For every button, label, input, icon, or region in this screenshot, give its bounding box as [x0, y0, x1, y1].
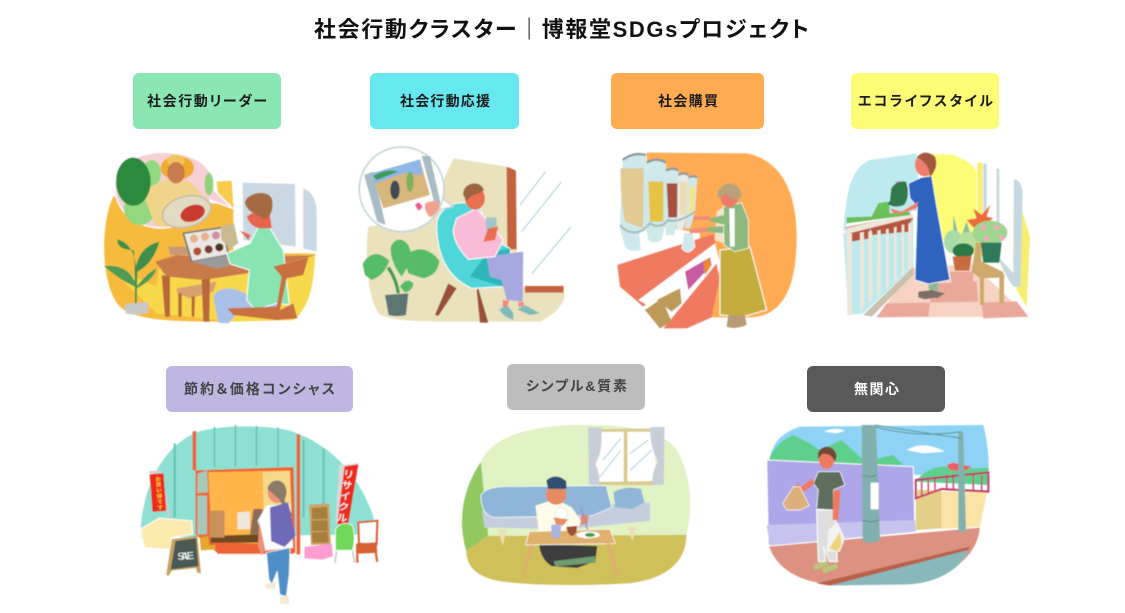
foreground chair	[227, 257, 308, 320]
shop opening	[195, 467, 295, 554]
person eating	[535, 476, 597, 568]
jar	[682, 233, 695, 252]
illustration: online meeting with coffee farmer	[104, 152, 317, 323]
window frames	[983, 163, 1023, 287]
plant	[363, 240, 439, 316]
sofa	[140, 518, 193, 549]
label: 社会行動応援: 社会行動応援	[400, 93, 490, 109]
label: シンプル&質素	[507, 364, 645, 410]
pavement and road	[769, 528, 980, 586]
chairs	[335, 521, 377, 563]
table and chair	[155, 247, 317, 322]
plants and stool	[944, 205, 1007, 305]
speech bubble with farmer	[115, 152, 233, 233]
sky	[770, 425, 989, 475]
window and curtains	[588, 427, 664, 486]
label: 節約&価格コンシャス	[166, 366, 353, 412]
low table	[521, 524, 619, 578]
small chair	[200, 536, 215, 550]
man reading phone	[453, 183, 540, 320]
label: 無関心	[807, 366, 945, 412]
illustration: supporting on social media	[359, 147, 571, 323]
hills and red roof	[769, 435, 989, 485]
yellow wall with red railing	[916, 472, 988, 530]
illustration: indifferent shopper on street	[767, 425, 989, 586]
illustration: bulk store shopper	[617, 153, 797, 328]
beige background	[367, 158, 565, 322]
window	[243, 183, 296, 247]
green wall	[479, 425, 690, 536]
label: 社会購買	[611, 73, 764, 129]
sofa	[481, 486, 650, 546]
balcony floor	[877, 263, 1028, 318]
label: 社会行動リーダー: 社会行動リーダー	[147, 93, 267, 109]
illustration: recycle shop	[140, 425, 377, 604]
recycle banner: リサイクル	[335, 468, 355, 523]
small banner: お買い得です	[154, 475, 163, 511]
label: 社会行動リーダー	[133, 73, 281, 129]
woman with backpack	[258, 480, 295, 604]
label: 社会行動応援	[370, 73, 519, 129]
SALE board	[166, 536, 201, 576]
illustration: watering balcony plants	[843, 153, 1030, 318]
illustration: simple meal at home	[462, 425, 690, 585]
shelf and box	[305, 503, 333, 559]
sky and yellow wall	[843, 153, 920, 233]
label: 無関心: 無関心	[854, 381, 899, 397]
label: エコライフスタイル: エコライフスタイル	[858, 93, 993, 109]
purple wall	[767, 460, 915, 545]
shelf counter	[617, 234, 720, 328]
small banner	[149, 470, 171, 517]
woman in blue dress	[878, 153, 950, 299]
label: エコライフスタイル	[851, 73, 999, 129]
label: 節約&価格コンシャス: 節約＆価格コンシャス	[184, 381, 335, 397]
yellow background	[104, 197, 315, 322]
laptop	[183, 227, 228, 268]
dispensers	[620, 154, 697, 251]
floor	[466, 535, 686, 585]
balcony railing	[845, 202, 915, 317]
teal shop facade	[141, 426, 374, 538]
magnifier bubble	[359, 147, 453, 232]
orange background	[647, 153, 797, 317]
person with shopping bags	[783, 447, 845, 573]
armchair	[435, 203, 512, 323]
label: シンプル&質素: シンプル&質素	[526, 378, 627, 394]
plant	[104, 239, 159, 315]
title: 社会行動クラスター｜博報堂SDGsプロジェクト	[314, 17, 809, 42]
woman in green cardigan	[689, 183, 767, 328]
label: 社会購買: 社会購買	[658, 93, 718, 109]
window frame and light streaks	[507, 167, 571, 293]
SALE board: SALE	[177, 550, 195, 563]
utility poles and wires	[862, 425, 966, 543]
woman in green sweater	[213, 193, 289, 323]
